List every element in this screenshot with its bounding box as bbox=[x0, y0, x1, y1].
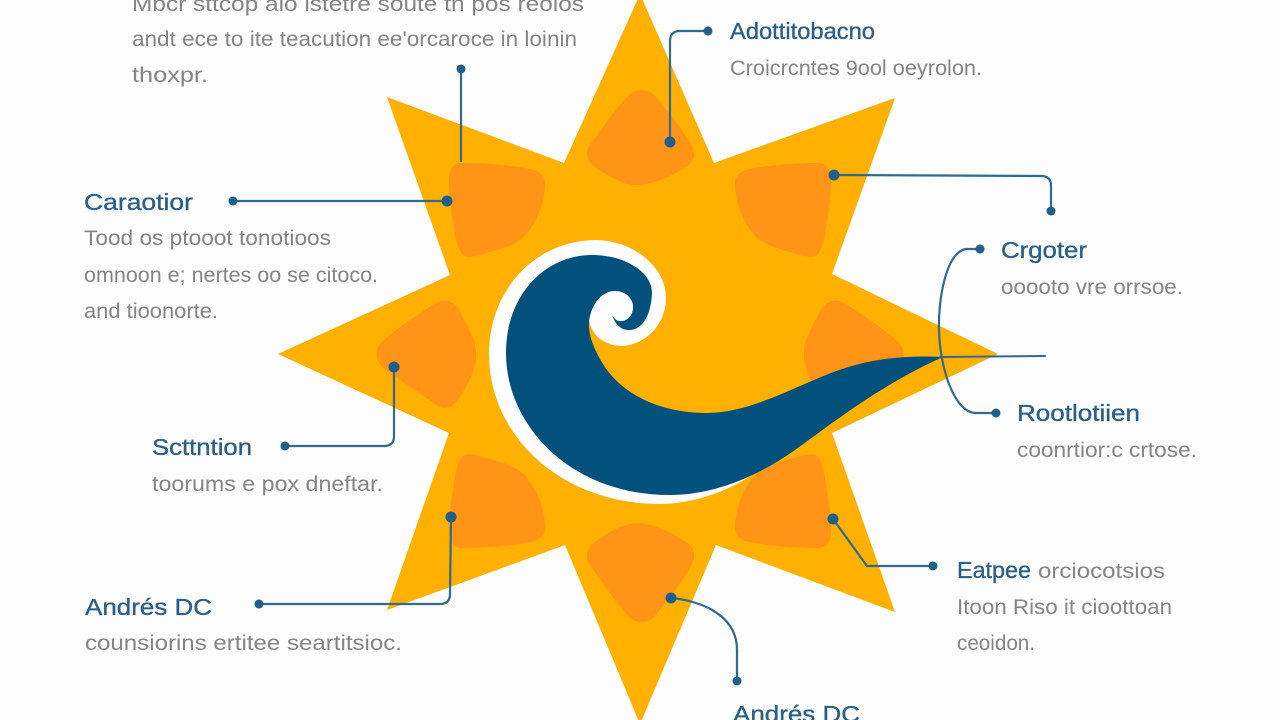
orange panel: upper right bbox=[735, 163, 831, 257]
text block: Crgoter bbox=[1001, 237, 1183, 299]
orange panel: lower left bbox=[449, 454, 545, 548]
text block: Crgoter: ooooto vre orrsoe. bbox=[1001, 276, 1183, 299]
orange panel: right bbox=[804, 301, 904, 408]
text block: Caraotior: Tood os ptooot tonotioos bbox=[84, 227, 331, 250]
text block: Rootlotiien: coonrtior:c crtose. bbox=[1017, 439, 1197, 462]
text block: Adottitobacno bbox=[730, 18, 982, 80]
text block: Eatpee: ceoidon. bbox=[957, 632, 1035, 655]
orange panel: upper left bbox=[449, 163, 545, 257]
text block: Crgoter: Crgoter bbox=[1001, 237, 1087, 263]
text block: Andrés DC left: counsiorins ertitee seartitsioc. bbox=[85, 632, 402, 655]
connector: top heading bbox=[664, 26, 712, 148]
blue wave bbox=[506, 255, 943, 495]
connector: lower right bbox=[828, 514, 938, 570]
connector: left heading bbox=[228, 196, 452, 206]
text block: Caraotior: and tioonorte. bbox=[84, 300, 218, 323]
text block: top: andt ece to ite teacution ee'orcaroce in loinin bbox=[132, 28, 577, 51]
connector: bottom bbox=[666, 592, 742, 686]
white spiral outline bbox=[489, 240, 752, 504]
connector: lower left bbox=[254, 512, 456, 608]
text block: Eatpee: Itoon Riso it cioottoan bbox=[957, 596, 1172, 619]
text block: Andrés DC left: Andrés DC bbox=[85, 594, 212, 620]
orange panel: lower right bbox=[735, 454, 831, 548]
text block: Caraotior: omnoon e; nertes oo se citoco. bbox=[84, 264, 378, 287]
text block: Eatpee: Eatpee bbox=[957, 557, 1031, 583]
text block: Rootlotiien: Rootlotiien bbox=[1017, 400, 1140, 426]
connector: left middle bbox=[280, 362, 400, 450]
text block: Eatpee: orciocotsios bbox=[1038, 560, 1165, 583]
text block: top: thoxpr. bbox=[132, 64, 208, 87]
text block: Scttntion: toorums e pox dneftar. bbox=[152, 473, 383, 496]
text block: Eatpee bbox=[957, 557, 1172, 655]
connector: right bracket bbox=[939, 244, 1000, 418]
wave spiral bbox=[489, 240, 1045, 504]
text block: Adottitobacno: Adottitobacno bbox=[730, 18, 875, 44]
orange panel: left bbox=[376, 301, 476, 408]
text block: Andrés DC left bbox=[85, 594, 402, 655]
text block: Rootlotiien bbox=[1017, 400, 1197, 462]
text block: Caraotior bbox=[84, 189, 378, 323]
text block: Adottitobacno: Croicrcntes 9ool oeyrolon. bbox=[730, 57, 982, 80]
wave tail line bbox=[940, 356, 1045, 357]
text block: Scttntion: Scttntion bbox=[152, 434, 252, 460]
text block: top bbox=[132, 0, 584, 87]
text block: Caraotior: Caraotior bbox=[84, 189, 193, 215]
sun star body bbox=[278, 0, 998, 720]
connector: top left text bbox=[456, 64, 466, 161]
orange panel: top bbox=[587, 90, 694, 185]
orange panel: bottom bbox=[587, 523, 694, 622]
text block: Scttntion bbox=[152, 434, 383, 496]
connector: upper right bbox=[828, 170, 1056, 216]
sun emblem bbox=[278, 0, 998, 720]
